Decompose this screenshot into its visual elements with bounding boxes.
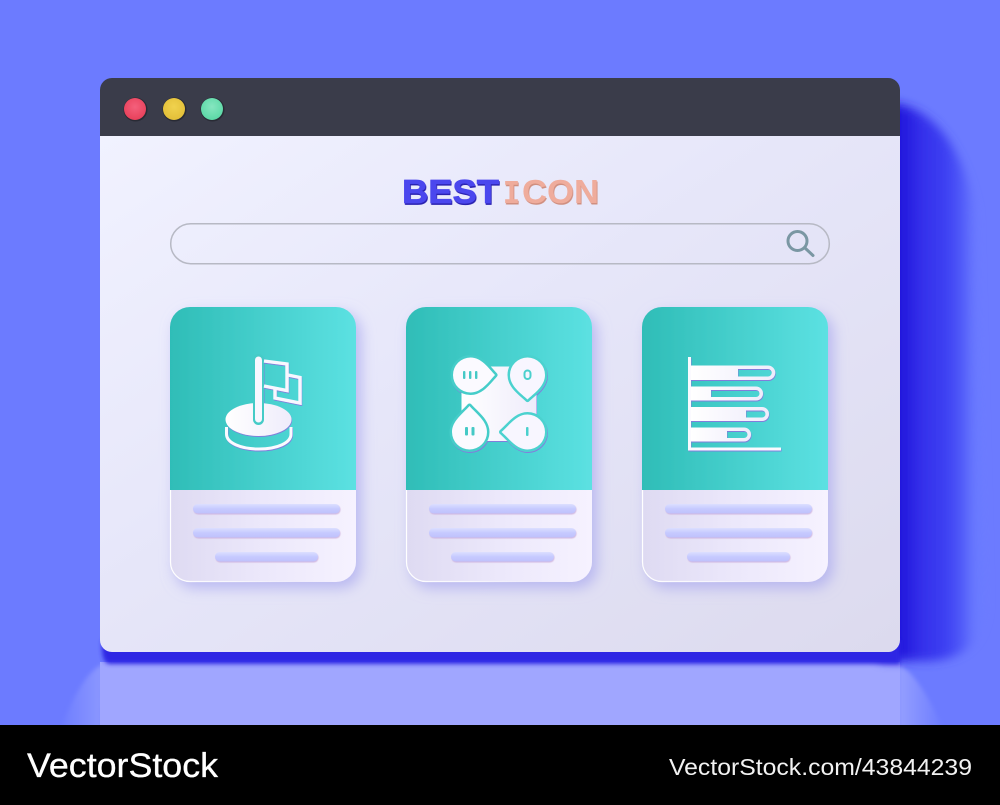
window controls bbox=[124, 98, 224, 122]
floor reflection bbox=[60, 662, 944, 730]
icon: magnifier bbox=[788, 232, 813, 256]
card 3 base bbox=[642, 307, 828, 582]
brand name: VectorStock bbox=[27, 747, 219, 785]
logo title: CON bbox=[522, 173, 599, 210]
logo title: I bbox=[503, 176, 520, 213]
pin: top right bbox=[510, 358, 545, 400]
pin: bottom right bbox=[502, 414, 545, 450]
watermark footer bbox=[0, 725, 1000, 805]
logo title bbox=[402, 173, 599, 213]
pin: top left bbox=[453, 358, 495, 392]
icon: flag on disc bbox=[226, 354, 300, 449]
card 3: bar chart bbox=[642, 307, 828, 582]
chart axes bbox=[688, 357, 781, 450]
card 1: flag on disc bbox=[170, 307, 356, 582]
chart bars bbox=[691, 366, 775, 380]
card 3 text lines bbox=[665, 504, 812, 562]
pin: bottom left bbox=[452, 406, 487, 450]
search bar bbox=[171, 224, 829, 264]
icon: horizontal bar chart bbox=[688, 357, 781, 450]
window body bbox=[100, 130, 900, 652]
image id: VectorStock.com/43844239 bbox=[669, 754, 972, 780]
title bar bbox=[100, 78, 900, 136]
logo title: BEST bbox=[402, 173, 499, 210]
shadow band below window bbox=[102, 640, 900, 664]
window shadow bbox=[102, 102, 985, 664]
card 1 text lines bbox=[193, 504, 340, 562]
card 2 base bbox=[406, 307, 592, 582]
browser window bbox=[100, 78, 900, 652]
card 2 text lines bbox=[429, 504, 576, 562]
icon: four pins around a square bbox=[452, 358, 545, 450]
card 1 base bbox=[170, 307, 356, 582]
card 2: map pins bbox=[406, 307, 592, 582]
